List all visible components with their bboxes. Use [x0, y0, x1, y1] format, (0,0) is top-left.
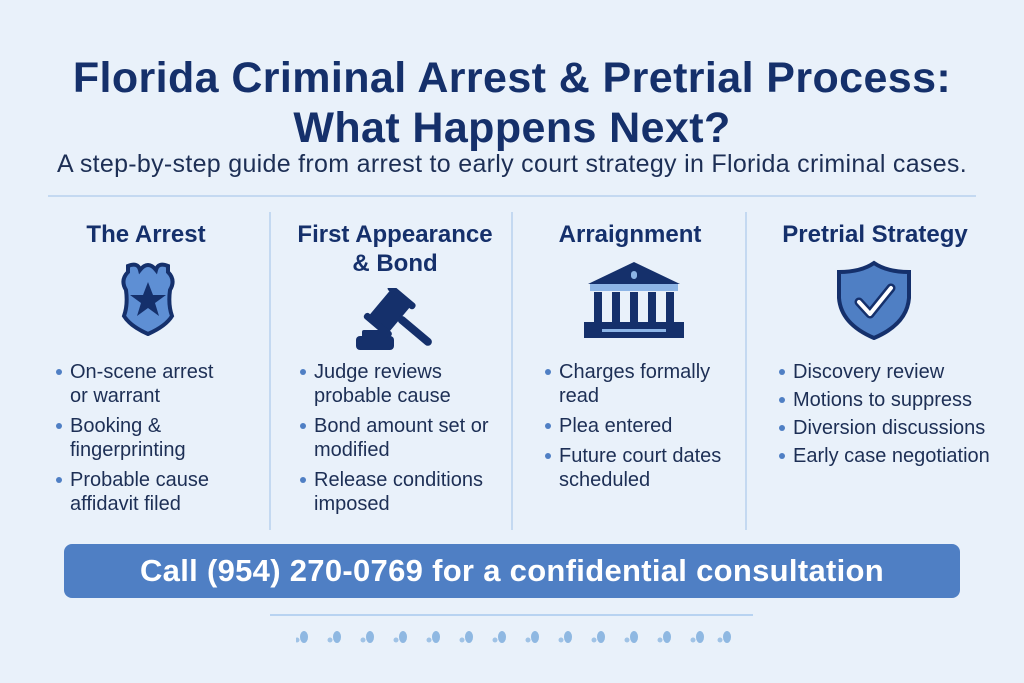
- bullets: Discovery review: [793, 361, 944, 383]
- call to action button: Call (954) 270-0769 for a confidential consultation: [140, 553, 884, 588]
- panel: the arrest: The Arrest: [86, 221, 206, 248]
- title: What Happens Next?: [293, 104, 731, 152]
- bullets: Future court dates scheduled: [559, 445, 721, 491]
- title: Florida Criminal Arrest & Pretrial Process:: [73, 54, 951, 102]
- panel: pretrial strategy: Pretrial Strategy: [782, 221, 968, 248]
- bullets: Judge reviews probable cause: [314, 361, 451, 407]
- bullets: [300, 361, 489, 515]
- bullets: [545, 361, 721, 491]
- icon: shield check: [837, 260, 911, 340]
- panel: pretrial strategy: [779, 221, 990, 467]
- panel: first appearance: & Bond: [352, 250, 438, 277]
- bullets: Early case negotiation: [793, 445, 990, 467]
- bullets: Probable cause affidavit filed: [70, 469, 209, 515]
- panel: arraignment: [545, 221, 721, 491]
- bullets: Diversion discussions: [793, 417, 985, 439]
- icon: gavel: [356, 288, 432, 350]
- bullets: Release conditions imposed: [314, 469, 483, 515]
- panel: first appearance: First Appearance: [297, 221, 493, 248]
- panel: arraignment: Arraignment: [559, 221, 701, 248]
- icon: courthouse: [584, 262, 684, 338]
- panel: the arrest: [56, 221, 214, 515]
- icon: badge: [121, 262, 175, 336]
- bullets: Charges formally read: [559, 361, 710, 407]
- subtitle: A step-by-step guide from arrest to early court strategy in Florida criminal cases.: [57, 150, 967, 178]
- bullets: [779, 361, 990, 467]
- bullets: Booking & fingerprinting: [70, 415, 186, 461]
- decorative footprints row: [296, 631, 731, 643]
- bullets: On-scene arrest or warrant: [70, 361, 213, 407]
- bullets: Bond amount set or modified: [314, 415, 489, 461]
- title: [73, 54, 951, 152]
- call to action button: [64, 544, 960, 598]
- bullets: Motions to suppress: [793, 389, 972, 411]
- panel: first appearance: [297, 221, 493, 515]
- bullets: [56, 361, 214, 515]
- bullets: Plea entered: [559, 415, 672, 437]
